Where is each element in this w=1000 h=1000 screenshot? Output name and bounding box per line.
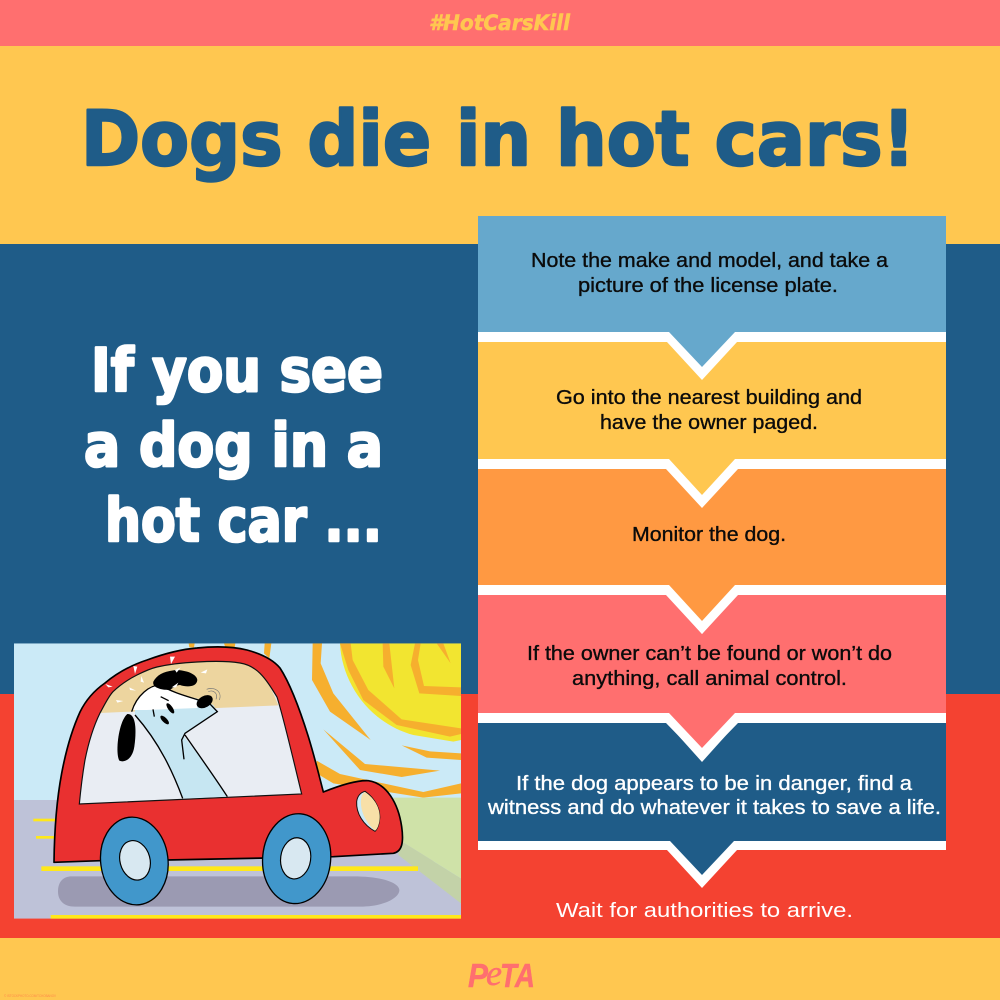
PETA logo: TA: [500, 957, 535, 994]
steps flow: [478, 216, 946, 888]
step 5: find a witness: If the dog appears to be in danger, find a: [516, 772, 913, 795]
step 4: call animal control: [478, 585, 946, 760]
car body: [54, 647, 403, 862]
illustration: dog in hot car: [14, 643, 461, 919]
photo credit: © ISTOCKPHOTO.COM/TCHOBANOV: [4, 994, 56, 998]
PETA logo: [468, 953, 535, 994]
step 1: note make and model: Note the make and model, and take a: [531, 249, 889, 272]
step 4: call animal control: If the owner can’t be found or won’t do: [527, 642, 892, 665]
car window: [79, 661, 302, 804]
step 1: note make and model: [478, 216, 946, 367]
hashtag: #HotCarsKill: [429, 11, 571, 35]
PETA logo: P: [468, 957, 489, 994]
step 3: monitor the dog: [478, 459, 946, 634]
step 5: find a witness: [478, 713, 946, 888]
road and grass: [14, 798, 461, 919]
step 2: page the owner: have the owner paged.: [600, 411, 818, 434]
title: Dogs die in hot cars!: [81, 94, 915, 183]
left heading: hot car ...: [105, 486, 382, 556]
left heading: If you see: [91, 336, 383, 406]
rear wheel: [100, 816, 169, 906]
dog: [105, 657, 227, 798]
front wheel: [262, 813, 332, 904]
step 2: page the owner: Go into the nearest building and: [556, 386, 862, 409]
step 3: monitor the dog: Monitor the dog.: [632, 523, 786, 546]
final step text: Wait for authorities to arrive.: [556, 899, 853, 922]
left heading: [84, 336, 383, 556]
PETA logo: e: [486, 953, 502, 993]
step 2: page the owner: [478, 332, 946, 508]
step 1: note make and model: picture of the license plate.: [578, 274, 838, 297]
step 4: call animal control: anything, call animal control.: [572, 667, 847, 690]
step 5: find a witness: witness and do whatever it takes to save a life.: [487, 796, 941, 819]
headlight: [357, 791, 380, 831]
left heading: a dog in a: [84, 411, 383, 481]
icon: sun: [189, 643, 461, 798]
